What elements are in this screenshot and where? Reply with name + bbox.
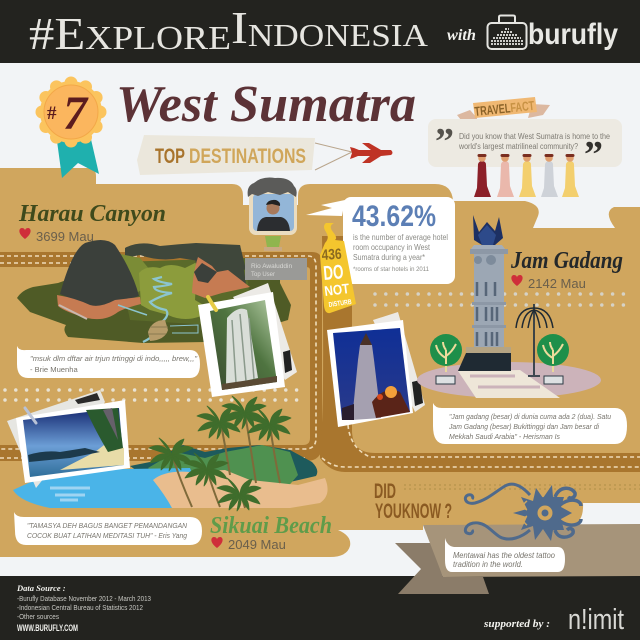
illustration: Sikuai beach xyxy=(13,396,328,511)
door hanger: 436 do not disturb xyxy=(320,223,356,313)
title: #ExploreIndonesia: NDONESIA xyxy=(248,17,428,53)
quote: Eris Yang: "TAMASYA DEH BAGUS BANGET PEMANDANGAN xyxy=(27,521,187,530)
stat card: hotel occupancy: 43.62% xyxy=(352,200,436,233)
quote: Herisman Is: Mekkah Saudi Arabia" - Herisman Is xyxy=(449,432,560,441)
island xyxy=(130,445,317,482)
top user label xyxy=(245,258,307,280)
badge ribbon xyxy=(57,135,99,178)
vote count: Jam Gadang: 2142 Mau xyxy=(528,276,586,291)
icons: five women in traditional dress xyxy=(474,154,579,197)
panel: travel fact bubble: ” xyxy=(435,121,454,163)
top destinations banner: TOP xyxy=(155,145,185,168)
fact bubble: Mentawai tattoo: tradition in the world. xyxy=(453,560,523,569)
quote: Eris Yang xyxy=(14,512,202,545)
travel fact ribbon xyxy=(457,97,550,125)
top destinations banner: DESTINATIONS xyxy=(189,145,306,168)
logo: nlimit: n!imit xyxy=(568,604,624,636)
fact bubble: Mentawai tattoo xyxy=(445,538,565,572)
quote: Brie Muenha: "msuk dlm dftar air trjun trtinggi di indo,,,,, brew,,," xyxy=(30,354,197,363)
quote: Herisman Is: "Jam gadang (besar) di dunia cuma ada 2 (dua). Satu xyxy=(449,412,612,421)
data source text: -Other sources xyxy=(17,614,59,621)
trees xyxy=(445,352,447,372)
title: #ExploreIndonesia: #EXPLORE xyxy=(29,8,218,59)
location heading: Jam Gadang: Jam Gadang xyxy=(510,248,623,274)
data source text: Data Source : xyxy=(16,583,66,593)
fact bubble: Mentawai tattoo: Mentawai has the oldest tattoo xyxy=(453,551,556,560)
panel: travel fact bubble: Did you know that West Sumatra is home to the xyxy=(459,132,610,141)
location heading: Harau Canyon: Harau Canyon xyxy=(18,201,166,227)
decorative stitched band xyxy=(404,485,640,489)
quote: Herisman Is xyxy=(433,403,627,444)
icon: heart, Harau Canyon xyxy=(19,228,31,239)
header bar xyxy=(0,0,640,63)
stat card: hotel occupancy xyxy=(306,197,455,284)
heading: did you know: DID xyxy=(374,480,396,503)
icon: Mentawai tattoo ornament xyxy=(465,484,581,541)
top user label: Rio Awaluddin xyxy=(251,263,292,270)
data source text: -Burufly Database November 2012 - March 2013 xyxy=(17,596,151,603)
door hanger: 436 do not disturb: 436 xyxy=(321,246,342,264)
vote count: Harau Canyon: 3699 Mau xyxy=(36,229,94,244)
data source text: WWW.BURUFLY.COM xyxy=(17,623,78,633)
icon: heart, Jam Gadang xyxy=(511,275,523,286)
top destinations banner xyxy=(137,135,352,175)
sea xyxy=(13,468,205,508)
supported by label: supported by : xyxy=(483,619,550,630)
badge: rank #7: 7 xyxy=(63,87,89,140)
panel: travel fact bubble: ” xyxy=(584,134,603,176)
data source text: -Indonesian Central Bureau of Statistics 2012 xyxy=(17,605,143,612)
palm trees xyxy=(149,396,291,511)
top user portrait xyxy=(248,178,297,251)
main heading: West Sumatra: West Sumatra xyxy=(116,76,416,133)
fountain lamp xyxy=(528,304,540,376)
icon: airplane xyxy=(350,143,392,163)
location heading: Sikuai Beach: Sikuai Beach xyxy=(210,513,332,539)
door hanger: 436 do not disturb: DO xyxy=(323,261,344,285)
title: #ExploreIndonesia: I xyxy=(231,2,248,53)
logo text: burufly: burufly xyxy=(528,18,618,51)
travel fact ribbon: TRAVELFACT xyxy=(474,98,535,119)
footer bar xyxy=(0,576,640,640)
benches xyxy=(436,376,455,384)
icon: burufly suitcase logo xyxy=(488,16,526,49)
photo: beach polaroid xyxy=(7,390,130,488)
panel: travel fact bubble: world's largest matrilineal community? xyxy=(458,142,578,151)
sand xyxy=(153,470,328,508)
quote: Herisman Is: Jam Gadang (besar) Bukittinggi dan Jam besar di xyxy=(448,422,599,431)
heading: did you know xyxy=(374,480,452,523)
stat card: hotel occupancy: *rooms of star hotels in 2011 xyxy=(353,267,430,273)
panel: tan map background xyxy=(0,168,640,557)
top user label: Top User xyxy=(251,272,275,278)
icon: heart, Sikuai Beach xyxy=(211,537,223,548)
data source text xyxy=(16,583,151,633)
badge: rank #7 xyxy=(36,76,106,178)
photo: night clock tower polaroid xyxy=(327,312,425,427)
panel: travel fact bubble xyxy=(428,119,622,176)
quote: Brie Muenha xyxy=(17,346,200,378)
quote: Eris Yang: COCOK BUAT LATIHAN MEDITASI TUH" - Eris Yang xyxy=(27,531,188,540)
quote: Brie Muenha: - Brie Muenha xyxy=(30,365,78,374)
plaza xyxy=(417,362,601,398)
logo text: with: with xyxy=(447,27,476,44)
illustration: Harau Canyon xyxy=(17,240,291,343)
photo: waterfall polaroid xyxy=(198,283,297,397)
heading: did you know: YOUKNOW ? xyxy=(375,500,452,523)
stat card: hotel occupancy: Sumatra during a year* xyxy=(353,253,425,262)
door hanger: 436 do not disturb: DISTURB xyxy=(328,299,352,309)
vote count: Sikuai Beach: 2049 Mau xyxy=(228,537,286,552)
tower xyxy=(474,253,504,349)
stat card: hotel occupancy: is the number of average hotel xyxy=(353,233,448,242)
badge: rank #7: # xyxy=(47,103,57,124)
did you know ribbon xyxy=(395,524,640,594)
stat card: hotel occupancy: room occupancy in West xyxy=(353,243,431,252)
door hanger: 436 do not disturb: NOT xyxy=(323,280,351,299)
illustration: Jam Gadang clock tower xyxy=(417,215,601,398)
road network xyxy=(0,236,640,472)
